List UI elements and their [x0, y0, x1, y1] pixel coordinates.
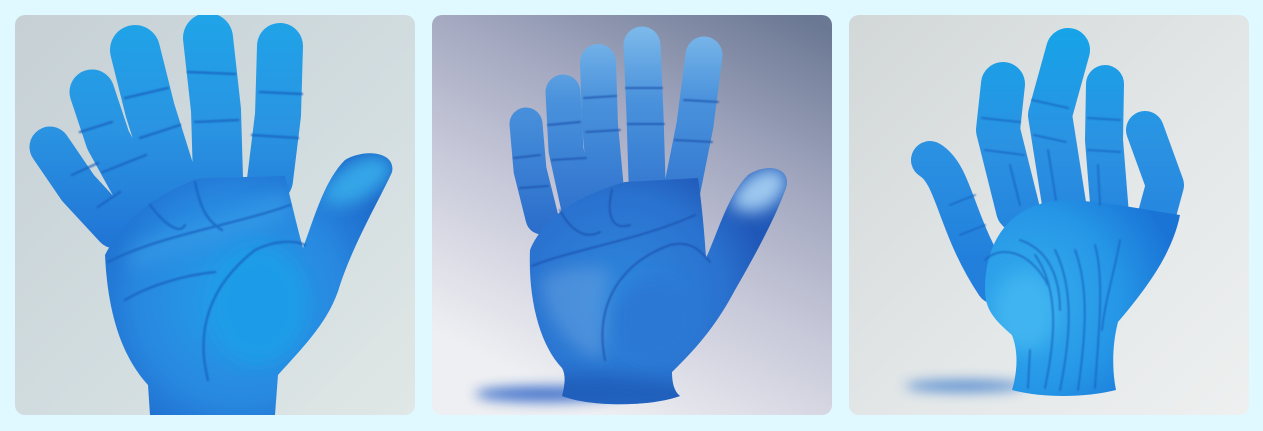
shadow under hand	[475, 386, 615, 402]
panel: hand image 1	[15, 15, 415, 415]
icon: blue hand sculpture on base	[514, 45, 787, 410]
icon: textured blue hand with curled fingers	[930, 50, 1180, 396]
panel: hand image 3	[849, 15, 1249, 415]
panel: hand image 2	[432, 15, 832, 415]
icon: front-facing blue hand	[50, 38, 392, 415]
shadow under hand	[905, 380, 1025, 392]
